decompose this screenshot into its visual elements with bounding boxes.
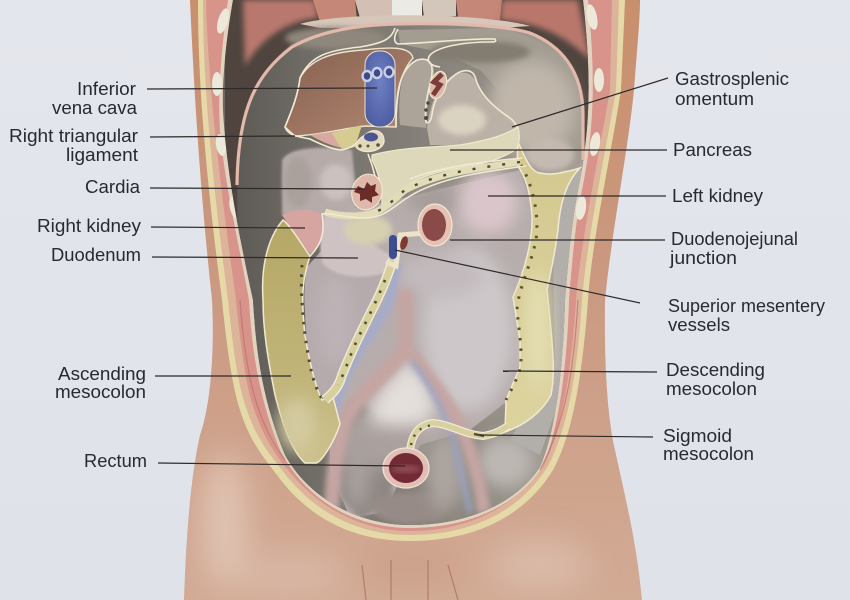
label: duodenojejunal junction bbox=[669, 228, 798, 268]
label: right triangular ligament: ligament bbox=[66, 144, 138, 165]
abdominal wall cut layers bbox=[198, 0, 625, 541]
label: pancreas: Pancreas bbox=[673, 139, 752, 160]
liver bbox=[285, 48, 413, 136]
inferior vena cava bbox=[363, 51, 395, 127]
label: duodenum: Duodenum bbox=[51, 244, 141, 265]
label: right kidney: Right kidney bbox=[37, 215, 142, 236]
duodenojejunal junction bbox=[418, 204, 452, 246]
label: superior mesentery vessels: vessels bbox=[668, 314, 730, 335]
label: inferior vena cava bbox=[52, 78, 138, 118]
left kidney bbox=[458, 170, 518, 234]
label: rectum: Rectum bbox=[84, 450, 147, 471]
duodenum bbox=[320, 213, 395, 277]
label: gastrosplenic omentum: omentum bbox=[675, 88, 754, 109]
label: sigmoid mesocolon bbox=[663, 425, 754, 464]
sigmoid mesocolon bbox=[410, 423, 508, 450]
upper right stomach bed bbox=[398, 28, 583, 174]
upper thoracic muscle bbox=[225, 0, 595, 240]
groin folds bbox=[362, 560, 458, 600]
label: ascending mesocolon bbox=[55, 363, 146, 402]
pancreas bbox=[372, 127, 519, 206]
transverse mesocolon bbox=[310, 158, 526, 256]
label: sigmoid mesocolon: Sigmoid bbox=[663, 425, 732, 446]
label: inferior vena cava: vena cava bbox=[52, 97, 138, 118]
label: ascending mesocolon: Ascending bbox=[58, 363, 146, 384]
pancreatic head bbox=[344, 215, 392, 245]
hepatic vein openings bbox=[363, 67, 393, 81]
left mesocolon fat bbox=[263, 220, 340, 463]
label: cardia: Cardia bbox=[85, 176, 141, 197]
bladder highlight bbox=[368, 362, 433, 426]
label: right triangular ligament bbox=[9, 125, 138, 165]
pelvic region bbox=[335, 400, 533, 524]
label: duodenojejunal junction: junction bbox=[669, 247, 737, 268]
rectum bbox=[383, 448, 429, 488]
labels: right side bbox=[663, 68, 826, 464]
hepatoduodenal ligament bbox=[356, 131, 384, 180]
cardia bbox=[348, 171, 386, 213]
label: superior mesentery vessels bbox=[668, 295, 826, 335]
skin highlights bbox=[203, 450, 590, 599]
abdominal cavity bbox=[222, 0, 589, 525]
stomach bed middle bbox=[399, 59, 434, 128]
coronary and falciform folds bbox=[285, 28, 496, 150]
label: descending mesocolon bbox=[666, 359, 765, 399]
right kidney bbox=[282, 210, 323, 254]
peritoneal cavity floor bbox=[237, 25, 583, 540]
rib cartilage knobs, left bbox=[215, 7, 231, 35]
label: sigmoid mesocolon: mesocolon bbox=[663, 443, 754, 464]
label: gastrosplenic omentum bbox=[675, 68, 789, 109]
label: inferior vena cava: Inferior bbox=[77, 78, 136, 99]
label: duodenojejunal junction: Duodenojejunal bbox=[671, 228, 798, 249]
label: left kidney: Left kidney bbox=[672, 185, 764, 206]
lower-left bowel area bbox=[304, 251, 328, 398]
label: superior mesentery vessels: Superior mesentery bbox=[668, 295, 826, 316]
retroperitoneal lilac area bbox=[282, 148, 358, 215]
label: descending mesocolon: mesocolon bbox=[666, 378, 757, 399]
wall stripes, lower bbox=[240, 300, 578, 470]
labels: left side bbox=[9, 78, 147, 471]
iliac vessels bbox=[332, 262, 484, 512]
superior mesentery vessels bbox=[386, 233, 426, 266]
rib cartilage knobs, right bbox=[584, 3, 600, 31]
root of small bowel mesentery bbox=[325, 260, 393, 400]
stomach bed outline and slice bbox=[396, 59, 519, 142]
right colic gutter bbox=[510, 170, 582, 455]
peritoneal outline bbox=[237, 24, 583, 185]
label: ascending mesocolon: mesocolon bbox=[55, 381, 146, 402]
label: descending mesocolon: Descending bbox=[666, 359, 765, 380]
leader lines bbox=[147, 78, 668, 466]
vessels along edge bbox=[301, 265, 326, 403]
torso skin bbox=[170, 0, 660, 600]
right mesocolon fat bbox=[505, 142, 580, 432]
label: gastrosplenic omentum: Gastrosplenic bbox=[675, 68, 789, 89]
lower-right bowel area bbox=[422, 248, 514, 412]
label: right triangular ligament: Right triangular bbox=[9, 125, 138, 146]
